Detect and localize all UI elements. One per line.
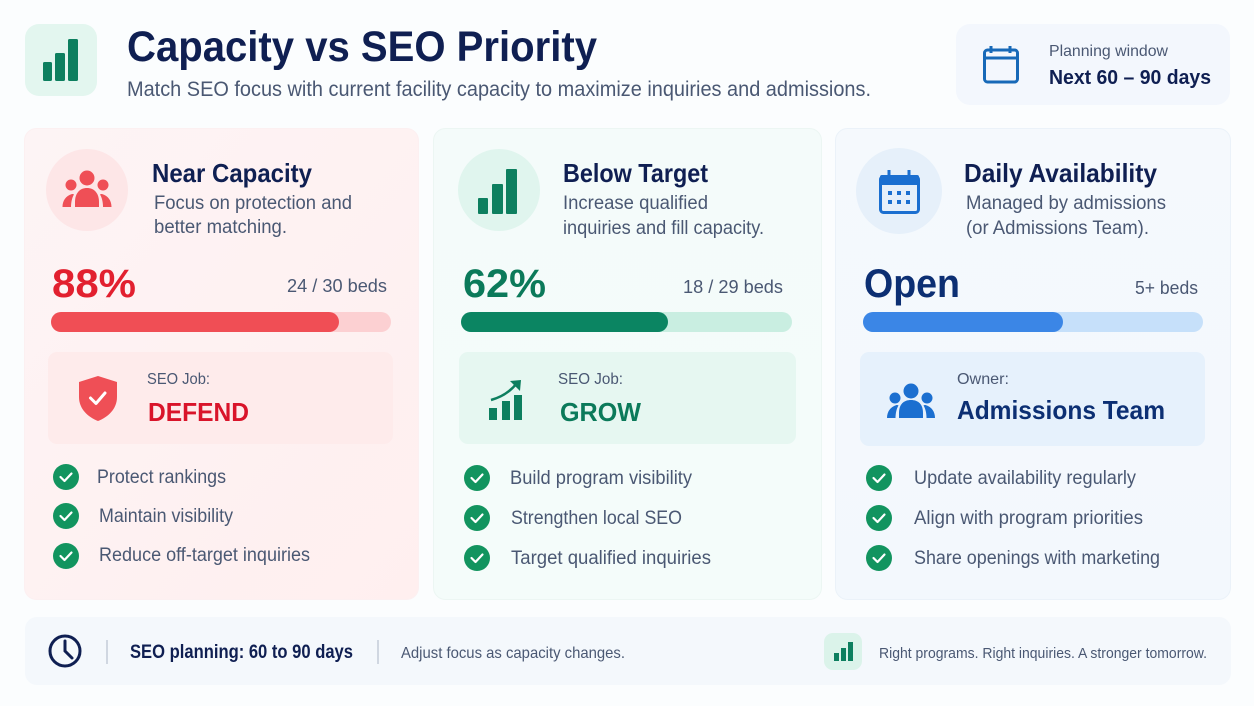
- icon: people in circle: [46, 149, 128, 231]
- footer bar: [25, 617, 1231, 685]
- icon: calendar in circle: [856, 148, 942, 234]
- checklist: Strengthen local SEO: [511, 508, 682, 529]
- bed count: 5+ beds: [1135, 278, 1198, 298]
- checklist: [464, 465, 711, 571]
- panel: near capacity: [24, 128, 418, 600]
- description: Managed by admissions: [966, 193, 1166, 214]
- job value: DEFEND: [148, 397, 249, 427]
- planning window value: Next 60 – 90 days: [1049, 66, 1211, 89]
- description: [966, 193, 1166, 239]
- header icon: bar chart: [25, 24, 97, 96]
- owner box: [860, 352, 1205, 446]
- planning window label: Planning window: [1049, 43, 1168, 60]
- icon: clock: [50, 636, 80, 666]
- icon: mini bars: [824, 633, 862, 670]
- subtitle: Match SEO focus with current facility capacity to maximize inquiries and admissions.: [127, 78, 871, 101]
- checklist: Reduce off-target inquiries: [99, 545, 310, 566]
- panel: daily availability: [836, 128, 1230, 600]
- icon: growth chart: [489, 380, 522, 420]
- owner label: Owner:: [957, 371, 1009, 388]
- checklist: Share openings with marketing: [914, 548, 1160, 569]
- planning window callout: [956, 24, 1230, 105]
- bed count: 24 / 30 beds: [287, 276, 387, 296]
- planning statement: SEO planning: 60 to 90 days: [130, 642, 353, 663]
- job value: GROW: [560, 397, 641, 427]
- title: Capacity vs SEO Priority: [127, 23, 597, 71]
- checklist: [866, 465, 1160, 571]
- job label: SEO Job:: [147, 371, 210, 388]
- SEO job box: [459, 352, 796, 444]
- stat: open: Open: [864, 262, 960, 306]
- bed count: 18 / 29 beds: [683, 277, 783, 297]
- icon: shield: [79, 376, 117, 421]
- stat: 62%: 62%: [463, 262, 546, 306]
- checklist: Target qualified inquiries: [511, 548, 711, 569]
- progress bar: [461, 312, 792, 332]
- heading: Daily Availability: [964, 158, 1158, 188]
- stat: 88%: 88%: [52, 262, 136, 306]
- checklist: Protect rankings: [97, 467, 226, 488]
- description: better matching.: [154, 217, 287, 238]
- progress bar: [51, 312, 391, 332]
- icon: team: [887, 384, 935, 418]
- icon: calendar: [984, 46, 1018, 82]
- checklist: Maintain visibility: [99, 506, 233, 527]
- heading: Below Target: [563, 158, 708, 188]
- checklist: Build program visibility: [510, 468, 692, 489]
- heading: Near Capacity: [152, 158, 312, 188]
- job label: SEO Job:: [558, 371, 623, 388]
- description: [563, 193, 764, 239]
- description: inquiries and fill capacity.: [563, 218, 764, 239]
- checklist: Update availability regularly: [914, 468, 1136, 489]
- checklist: Align with program priorities: [914, 508, 1143, 529]
- tagline: Right programs. Right inquiries. A stronger tomorrow.: [879, 646, 1207, 662]
- SEO job box: [48, 352, 393, 444]
- description: [154, 193, 352, 238]
- panel: below target: [434, 128, 822, 600]
- progress bar: [863, 312, 1203, 332]
- description: (or Admissions Team).: [966, 218, 1149, 239]
- description: Increase qualified: [563, 193, 708, 214]
- owner value: Admissions Team: [957, 395, 1165, 425]
- description: Focus on protection and: [154, 193, 352, 214]
- icon: bars in circle: [458, 149, 540, 231]
- checklist: [53, 464, 310, 569]
- adjust note: Adjust focus as capacity changes.: [401, 645, 625, 662]
